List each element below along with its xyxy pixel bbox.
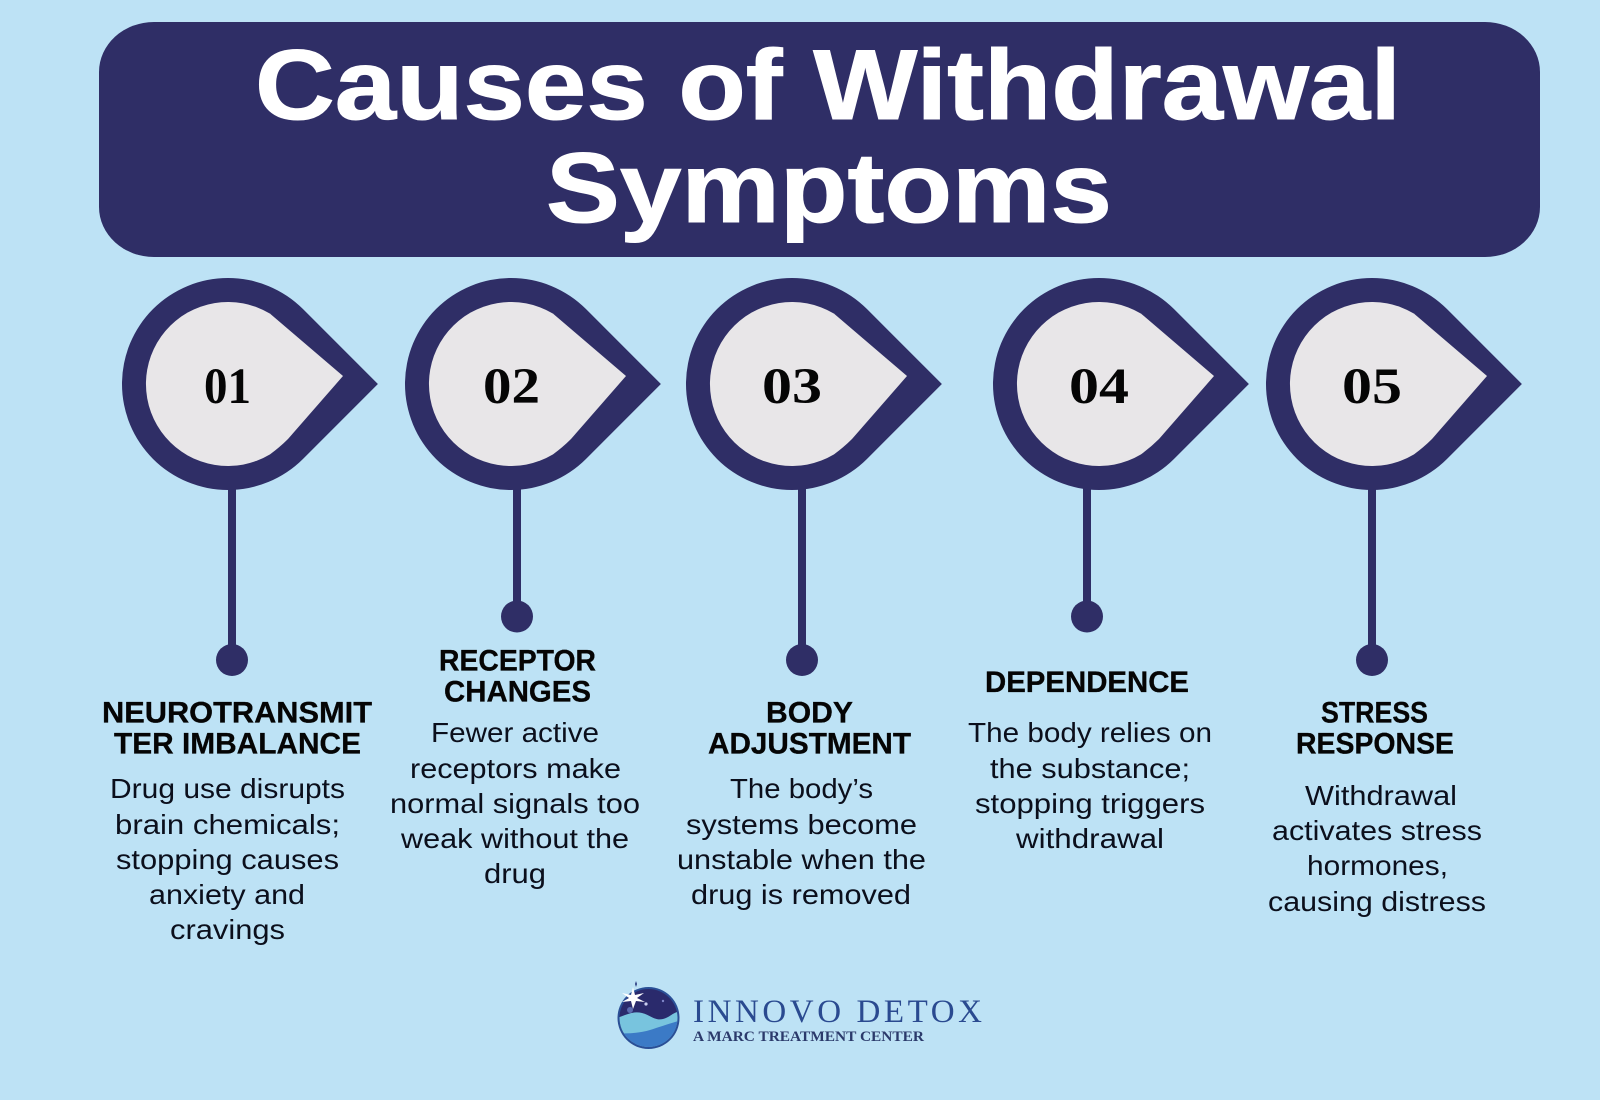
description 1 bbox=[110, 773, 345, 945]
connector stem 3 bbox=[786, 485, 818, 676]
title banner bbox=[99, 22, 1540, 257]
heading 2 bbox=[439, 644, 596, 708]
description 2: receptors make bbox=[410, 753, 621, 784]
connector stem 1 bbox=[216, 485, 248, 676]
description 2: weak without the bbox=[400, 823, 629, 854]
heading 3: ADJUSTMENT bbox=[708, 728, 911, 760]
title text bbox=[255, 29, 1401, 243]
description 1: Drug use disrupts bbox=[110, 773, 345, 804]
heading 5: RESPONSE bbox=[1296, 728, 1454, 760]
badge 05 bbox=[1266, 278, 1522, 490]
description 4: the substance; bbox=[990, 753, 1190, 784]
panel: step 3 body adjustment bbox=[677, 278, 942, 910]
heading 1: TER IMBALANCE bbox=[114, 728, 361, 760]
description 1: stopping causes bbox=[116, 844, 339, 875]
heading 2: RECEPTOR bbox=[439, 644, 596, 678]
description 5: hormones, bbox=[1307, 850, 1448, 881]
logo wordmark: INNOVO DETOX bbox=[693, 994, 982, 1030]
badge 01 bbox=[122, 278, 378, 490]
panel: step 1 neurotransmitter imbalance bbox=[102, 278, 378, 945]
description 5: causing distress bbox=[1268, 886, 1486, 917]
description 4: The body relies on bbox=[968, 717, 1212, 748]
description 1: cravings bbox=[170, 914, 285, 945]
description 3: The body’s bbox=[730, 773, 873, 804]
icon: starry sky and wave globe bbox=[617, 981, 682, 1052]
heading 3 bbox=[708, 696, 911, 760]
logo: Innovo Detox bbox=[617, 981, 982, 1052]
heading 4: DEPENDENCE bbox=[985, 666, 1189, 699]
badge 05: 05 bbox=[1342, 359, 1402, 415]
description 2: drug bbox=[484, 858, 546, 889]
description 2: normal signals too bbox=[390, 788, 640, 819]
logo tagline: A MARC TREATMENT CENTER bbox=[693, 1029, 924, 1045]
description 1: anxiety and bbox=[149, 879, 305, 910]
connector stem 2 bbox=[501, 485, 533, 632]
heading 5: STRESS bbox=[1321, 696, 1428, 730]
panel: step 5 stress response bbox=[1266, 278, 1522, 917]
title text: Symptoms bbox=[546, 132, 1112, 243]
description 4: stopping triggers bbox=[975, 788, 1205, 819]
badge 02 bbox=[405, 278, 661, 490]
badge 02: 02 bbox=[483, 359, 540, 415]
description 2 bbox=[390, 717, 640, 889]
badge 04: 04 bbox=[1069, 359, 1129, 415]
description 4: withdrawal bbox=[1015, 823, 1164, 854]
description 5: activates stress bbox=[1272, 815, 1482, 846]
heading 2: CHANGES bbox=[444, 676, 591, 708]
description 2: Fewer active bbox=[431, 717, 599, 748]
badge 01: 01 bbox=[204, 359, 251, 415]
description 4 bbox=[968, 717, 1212, 854]
description 3 bbox=[677, 773, 926, 910]
heading 3: BODY bbox=[766, 696, 853, 730]
description 3: systems become bbox=[686, 809, 917, 840]
panel: step 2 receptor changes bbox=[390, 278, 661, 889]
description 5 bbox=[1268, 780, 1486, 917]
description 3: unstable when the bbox=[677, 844, 926, 875]
panel: step 4 dependence bbox=[968, 278, 1249, 854]
description 3: drug is removed bbox=[691, 879, 911, 910]
description 1: brain chemicals; bbox=[115, 809, 340, 840]
heading 1 bbox=[102, 696, 372, 760]
description 5: Withdrawal bbox=[1305, 780, 1457, 811]
connector stem 5 bbox=[1356, 485, 1388, 676]
title text: Causes of Withdrawal bbox=[255, 29, 1401, 140]
badge 04 bbox=[993, 278, 1249, 490]
heading 1: NEUROTRANSMIT bbox=[102, 696, 372, 730]
badge 03: 03 bbox=[762, 359, 822, 415]
connector stem 4 bbox=[1071, 485, 1103, 632]
heading 5 bbox=[1296, 696, 1454, 760]
badge 03 bbox=[686, 278, 942, 490]
